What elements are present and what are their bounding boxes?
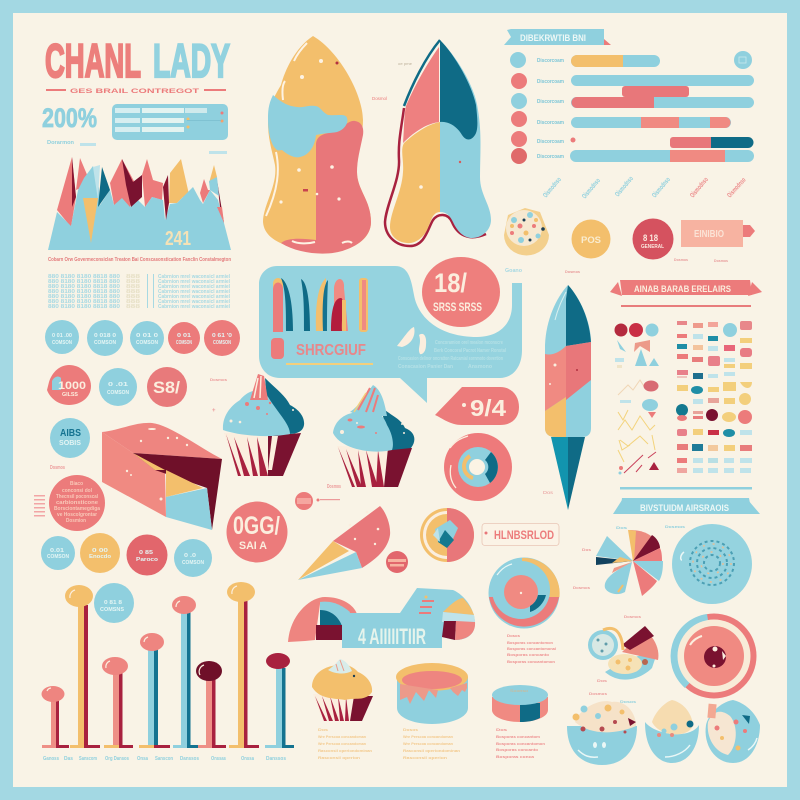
diagonal axis labels: Oismodnso <box>614 175 635 198</box>
peach arrow tag: EINIBIO <box>694 229 724 240</box>
info table panel <box>112 104 228 140</box>
table of small figures: 888 <box>126 284 140 290</box>
gantt row markers <box>510 52 527 164</box>
right rocket shape <box>385 40 491 246</box>
gantt row labels: Discorcoam <box>537 139 565 145</box>
tiny captions: Dosmos <box>674 257 689 262</box>
label grid <box>676 321 752 473</box>
stat circle 18: 18/ <box>434 268 467 298</box>
stat circle red <box>632 218 674 260</box>
stat circles row 1: COMSON <box>213 340 231 346</box>
stat circles row 5: COMSON <box>47 554 69 560</box>
cylinder notes: Dosos <box>403 727 419 732</box>
stat circle yellow <box>572 220 610 258</box>
chart small labels: Dorarmon <box>47 140 74 146</box>
cylinder notes: Wre Perscoa concandoman <box>403 734 454 739</box>
left rocket shape <box>263 36 371 254</box>
small cylinder notes: Bosporas conca <box>496 754 535 759</box>
lollipop 7 <box>227 582 259 748</box>
cylinder notes: Rasconsil operion <box>403 755 448 760</box>
coral paragraph circle: conconsi dol <box>62 488 93 494</box>
small captions by cupcake: Dosmos <box>327 484 341 490</box>
lollipop axis labels: Onssas <box>211 756 226 762</box>
stat circles row 2: 0 .01 <box>108 382 128 388</box>
rainbow banner <box>288 588 475 649</box>
stat circles row 1: 0 61 '0 <box>212 333 232 339</box>
stat circles row 5: 0 .0 <box>184 553 196 559</box>
stat circles row 1: 0 01 <box>177 333 191 339</box>
table of small figures: Cabrnion mrel waconsicl armiel <box>158 274 231 280</box>
table of small figures: Cabrnion mrel waconsicl armiel <box>158 279 231 285</box>
stat circle 18 <box>422 257 500 327</box>
bubble paragraph: Conscasion delinor oncratton Ratcamial sornmoto dovertion <box>398 356 503 362</box>
table of small figures: 888 <box>126 304 140 310</box>
cupcake 1 <box>223 374 304 476</box>
gantt row labels: Discorcoam <box>537 120 565 126</box>
lollipop 3 <box>102 657 133 748</box>
coral paragraph circle: carbionsticone <box>56 500 98 506</box>
right rocket note: oe pme <box>398 61 413 66</box>
cylinder notes <box>403 727 461 760</box>
title: LADY <box>153 34 230 87</box>
bubble paragraph: Conscasion Panier Dan <box>398 364 453 370</box>
circle small label <box>210 377 228 414</box>
circle label and tick list: Dosmos <box>50 465 65 471</box>
stat circle 18: SRSS SRSS <box>433 300 482 314</box>
lollipop 5 <box>172 596 200 748</box>
gantt row labels: Discorcoam <box>537 154 565 160</box>
ring chart <box>488 558 560 628</box>
stat circles row 2 <box>47 365 187 407</box>
table of small figures: 888 <box>126 274 140 280</box>
coral paragraph circle <box>49 475 105 531</box>
pie chart <box>596 530 663 596</box>
blue divider <box>620 487 752 490</box>
coral paragraph circle: Thecnsil poconscal <box>56 494 99 500</box>
small callout <box>295 492 340 510</box>
coral heading ribbon: AINAB BARAB ERELAIRS <box>634 284 731 295</box>
lollipop axis labels: Org Dansos <box>105 756 129 762</box>
blue heading ribbon <box>613 498 760 514</box>
coral paragraph circle: Borsciontamegdiga <box>54 506 100 512</box>
pie captions: Dosos <box>620 699 637 704</box>
stat circle red: 8 18 <box>643 233 658 243</box>
lollipop 4 <box>139 633 170 748</box>
small cylinder <box>492 685 548 722</box>
lollipop 8 <box>265 653 294 748</box>
lollipop 2 <box>65 585 100 748</box>
small cylinder notes <box>496 727 546 759</box>
price tag: 9/4 <box>470 395 506 421</box>
circle small label: Dosmos <box>210 377 228 382</box>
ring chart notes: Bosporas concanto <box>507 652 550 657</box>
lollipop chart <box>42 582 294 748</box>
cake wedge <box>102 423 222 530</box>
small stat circle <box>386 551 408 573</box>
blob pie <box>588 626 658 680</box>
gantt row labels: Discorcoam <box>537 79 565 85</box>
table of small figures: Cabrnion mrel waconsicl armiel <box>158 284 231 290</box>
circle label and tick list <box>34 465 65 516</box>
stat circles row 1: 0 01 0 <box>136 333 158 339</box>
cupcake notes: Dos <box>318 727 329 732</box>
stat circles row 1: COMSON <box>52 340 72 346</box>
icon matrix left <box>614 323 659 474</box>
stat circle 0GG: 0GG/ <box>233 512 280 540</box>
tiny captions: Goano <box>505 268 522 274</box>
lollipop axis labels: Das <box>64 756 73 762</box>
table of small figures: 880 8180 8180 8818 880 <box>48 289 120 295</box>
cylinder notes: Rasconsil operiondominan <box>403 748 461 753</box>
lollipop 1 <box>42 686 69 748</box>
ring chart notes: Bosporas concantomon <box>507 640 554 645</box>
sprinkle bowl <box>504 208 549 255</box>
ring chart notes <box>507 633 556 664</box>
gem badge <box>420 508 474 562</box>
stat circle yellow: POS <box>581 235 601 245</box>
lollipop axis labels: Danssos <box>266 756 286 762</box>
lollipop axis labels: Sanscom <box>79 756 97 762</box>
bubble paragraph: Concoramion orel mealon mconscre <box>435 340 503 346</box>
area chart <box>48 157 231 250</box>
lollipop axis labels: Danssos <box>180 756 199 762</box>
diagonal axis labels <box>542 175 748 200</box>
gantt bars <box>570 55 754 162</box>
chart caption: Cobarn Orw Govermeconsiclan Treaton Bai Conscasonstication Fanclin Constalmegton <box>48 257 231 263</box>
sprinkle circle <box>672 524 752 604</box>
chart small labels <box>47 140 227 154</box>
pie captions: Dosmos <box>624 614 642 619</box>
title: CHANL <box>45 34 141 87</box>
ice cream cone <box>298 506 390 580</box>
stat circles row 5: 0 85 <box>139 550 153 556</box>
cupcake notes: Rasconsil operion <box>318 755 361 760</box>
diagonal axis labels: Oismodnso <box>542 176 563 199</box>
pie captions: Dos <box>616 525 628 530</box>
topping bowl 2 <box>645 700 699 763</box>
ribbon heading: timeline: DIBEKRWTIB BNI <box>520 33 586 43</box>
bubble stripes <box>273 278 368 332</box>
bubble paragraph: Berk Concoral Pacrot Namer Ronstal <box>434 348 506 354</box>
coral heading ribbon <box>610 280 762 296</box>
pie captions <box>573 524 686 704</box>
pie captions: Dosmos <box>573 585 591 590</box>
table of small figures: 880 8180 8180 8818 880 <box>48 284 120 290</box>
circle small label: + <box>212 408 216 414</box>
small cylinder notes: Bosporas concanto <box>496 747 539 752</box>
diagonal axis labels: Oismodnso <box>689 176 710 199</box>
cupcake notes: Rasconsil operiondominan <box>318 748 373 753</box>
small cylinder notes: Dos <box>496 727 508 732</box>
stat circle red: GENERAL <box>641 244 664 250</box>
stat circles row 1: 0 01 .00 <box>52 333 72 339</box>
bubble paragraph: Ansmono <box>468 364 492 370</box>
bubble heading: SHRCGIUF <box>296 342 366 359</box>
gantt row labels: Discorcoam <box>537 99 565 105</box>
cupcake notes: Wre Perscoa concandoman <box>318 734 367 739</box>
cupcake 3 <box>312 659 373 721</box>
lollipop axis labels: Onsa <box>137 756 148 762</box>
stat circles row 1: COMSON <box>176 340 192 346</box>
mid small caption: Dosmol <box>372 96 387 101</box>
outlined label box: HLNBSRLOD <box>494 528 554 542</box>
coral paragraph circle: ve Hoscolgrontar <box>57 512 97 518</box>
stat circles row 5: Enocdo <box>89 554 111 560</box>
lollipop axis labels: Sanscon <box>155 756 173 762</box>
lollipop axis labels <box>43 756 286 762</box>
gantt row labels <box>537 58 565 160</box>
pie captions: Dos <box>597 678 608 683</box>
tiny captions: Dosmos <box>565 269 581 274</box>
lollipop note circle <box>94 583 134 623</box>
bubble icon <box>271 338 284 359</box>
eye target <box>671 614 756 698</box>
stat circles row 5: 0.01 <box>50 548 64 554</box>
ribbon heading: timeline <box>504 29 611 45</box>
ring chart notes: Bosporas concantomon <box>507 659 556 664</box>
cylinder chart large <box>396 663 468 724</box>
stat circles row 5: Paroco <box>136 557 158 563</box>
table of small figures: 880 8180 8180 8818 880 <box>48 299 120 305</box>
bubble paragraph <box>398 340 506 370</box>
note by donut: Dos <box>543 490 554 495</box>
donut <box>444 433 512 501</box>
stat circles row 1: COMSON <box>136 340 158 346</box>
lollipop axis labels: Onssa <box>241 756 254 762</box>
cupcake 2 <box>333 385 414 487</box>
table of small figures <box>48 274 231 310</box>
table of small figures: 888 <box>126 289 140 295</box>
stat circles row 5: 0 00 <box>92 548 108 554</box>
tiny captions <box>505 257 729 274</box>
stat circles row 1 <box>45 320 240 356</box>
quote marks <box>397 327 426 354</box>
small cylinder notes: Bosporas concantom <box>496 734 540 739</box>
lollipop highlights <box>47 586 237 691</box>
lollipop axis labels: Ganoss <box>43 756 59 762</box>
small cylinder: Soonso <box>510 688 529 693</box>
coral paragraph circle: Dosmion <box>66 518 86 524</box>
percent stat: 200% <box>42 103 97 133</box>
table of small figures: Cabrnion mrel waconsicl armiel <box>158 294 231 300</box>
peach arrow tag <box>681 220 755 247</box>
lollipop note circle: COMSNS <box>100 607 125 613</box>
table of small figures: 888 <box>126 279 140 285</box>
coral divider <box>621 305 751 307</box>
table of small figures: 880 8180 8180 8818 880 <box>48 279 120 285</box>
stat circles row 1: COMSON <box>94 340 116 346</box>
topping bowl 3 <box>706 700 760 763</box>
pie captions: Dosmos <box>665 524 686 529</box>
table of small figures: Cabrnion mrel waconsicl armiel <box>158 304 231 310</box>
cupcake notes <box>318 727 373 760</box>
stat circles row 2: S8/ <box>153 378 180 397</box>
diagonal axis labels: Oismodnso <box>581 177 602 200</box>
banner figure: 4 AIIIIITIIR <box>358 624 426 649</box>
table of small figures: Cabrnion mrel waconsicl armiel <box>158 289 231 295</box>
cylinder notes: Wre Perscoa concandoman <box>403 741 454 746</box>
price tag <box>435 387 519 425</box>
stat circles row 2: 1000 <box>58 380 86 392</box>
table of small figures: 888 <box>126 294 140 300</box>
table of small figures: 880 8180 8180 8818 880 <box>48 304 120 310</box>
bubble underline <box>286 363 373 365</box>
lollipop note circle: 0 81 8 <box>104 600 122 606</box>
ring chart notes: Bosporas concantomonal <box>507 646 556 651</box>
table of small figures: 888 <box>126 299 140 305</box>
pie captions: Dosmos <box>589 691 608 696</box>
blue heading ribbon: BIVSTUIDM AIRSRAOIS <box>640 503 729 514</box>
tall rocket <box>545 285 591 510</box>
stat circles row 2: GILSS <box>62 392 79 398</box>
stat circle row 3 <box>50 418 90 458</box>
table of small figures: 880 8180 8180 8818 880 <box>48 294 120 300</box>
subtitle: GES BRAIL CONTREGOT <box>70 89 200 95</box>
diagonal axis labels: Oismodnso <box>651 176 672 199</box>
cupcake notes: Wre Perscoa concandoman <box>318 741 367 746</box>
stat circles row 5: COMSON <box>182 560 204 566</box>
stat circles row 2: COMSON <box>107 390 129 396</box>
outlined label box <box>482 524 559 546</box>
topping bowl 1 <box>567 701 637 765</box>
table of small figures: 880 8180 8180 8818 880 <box>48 274 120 280</box>
small cylinder notes: Bosporas concantomon <box>496 741 546 746</box>
coral paragraph circle: Biaco <box>70 481 83 487</box>
lollipop 6 <box>196 661 226 748</box>
table of small figures: Cabrnion mrel waconsicl armiel <box>158 299 231 305</box>
diagonal axis labels: Oismodnso <box>726 177 748 199</box>
stat circle 0GG <box>226 502 288 562</box>
tiny captions: Dosmos <box>714 258 729 263</box>
badge icon <box>734 51 752 69</box>
ring chart notes: Dosos <box>507 633 521 638</box>
gantt row labels: Discorcoam <box>537 58 565 64</box>
pie captions: Dos <box>582 547 592 552</box>
stat circle row 3: AIBS <box>60 428 81 439</box>
stat circle row 3: SOBIS <box>59 440 81 447</box>
stat circle 0GG: SAI A <box>239 540 267 552</box>
speech bubble panel <box>259 266 522 403</box>
stat circles row 1: 0 018 0 <box>94 333 116 339</box>
stat circles row 5 <box>41 533 212 577</box>
chart value: 241 <box>165 228 191 250</box>
